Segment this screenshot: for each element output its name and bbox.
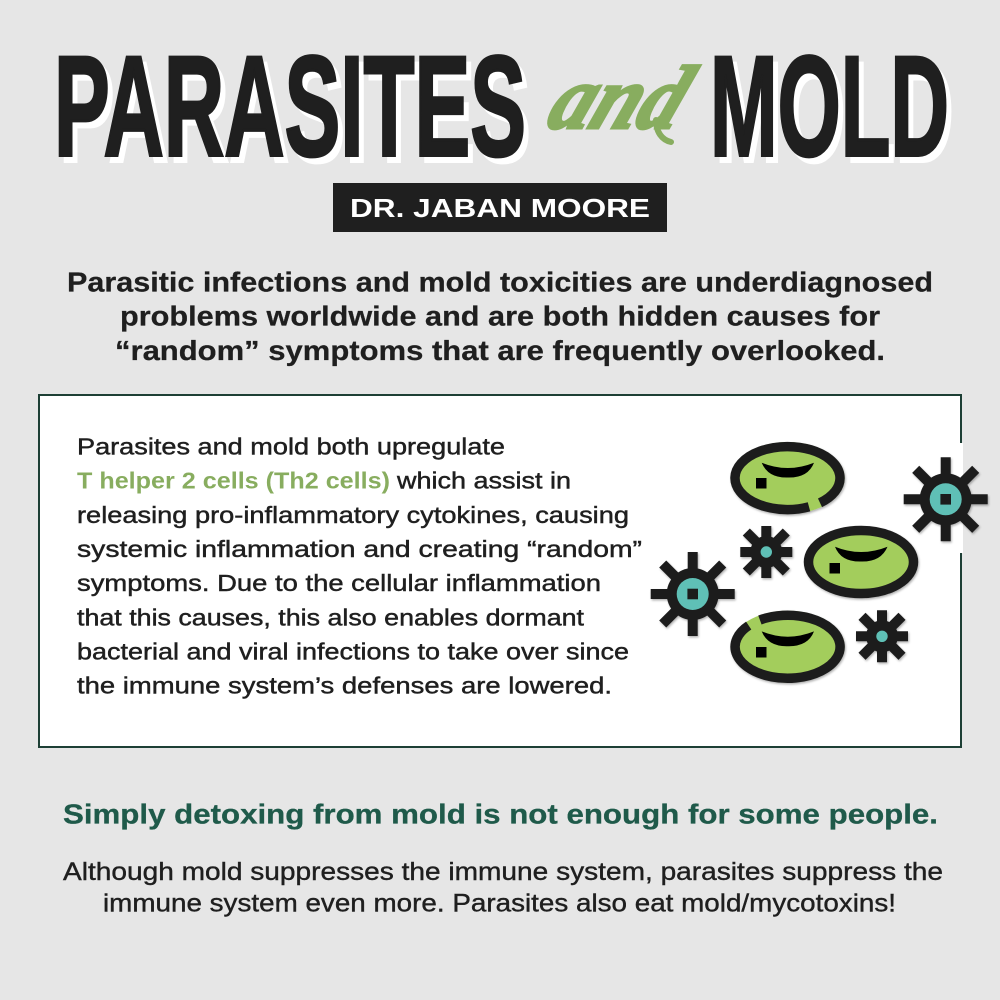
- icon: cell middle: [808, 530, 914, 594]
- icon: cell bottom: [731, 611, 845, 683]
- closing text: immune system even more. Parasites also eat mold/mycotoxins!: [103, 890, 896, 918]
- panel body text: Parasites and mold both upregulate: [77, 434, 505, 460]
- icon: parasites and mold spores: [651, 442, 988, 683]
- icon: cell top: [731, 442, 845, 514]
- title word: and: and: [536, 49, 707, 148]
- icon: small spore centre: [740, 526, 792, 578]
- intro text: problems worldwide and are both hidden causes for: [120, 300, 880, 332]
- icon: spore left: [651, 552, 735, 636]
- panel: explanation: [39, 395, 963, 747]
- highlighted term: T helper 2 cells (Th2 cells): [77, 468, 390, 494]
- panel body text: bacterial and viral infections to take over since: [77, 638, 629, 664]
- intro text: [67, 266, 933, 366]
- panel body text: that this causes, this also enables dormant: [77, 604, 585, 630]
- panel body text: [77, 434, 642, 698]
- intro text: Parasitic infections and mold toxicities are underdiagnosed: [67, 266, 933, 298]
- title: [54, 28, 954, 192]
- panel body text: releasing pro-inflammatory cytokines, causing: [77, 502, 629, 528]
- icon: small spore right: [856, 610, 908, 662]
- panel body text: symptoms. Due to the cellular inflammation: [77, 570, 601, 596]
- intro text: “random” symptoms that are frequently overlooked.: [115, 335, 885, 366]
- author badge: [333, 183, 667, 232]
- panel body text: the immune system’s defenses are lowered.: [77, 672, 612, 698]
- panel body text: which assist in: [396, 468, 571, 494]
- closing text: [63, 858, 943, 918]
- green callout heading: Simply detoxing from mold is not enough for some people.: [63, 798, 938, 830]
- author badge: DR. JABAN MOORE: [350, 193, 650, 223]
- title word: PARASITES: PARASITES: [59, 34, 531, 192]
- title word: PARASITES: [54, 28, 531, 192]
- icon: spore right: [904, 457, 988, 541]
- panel body text: systemic inflammation and creating “random”: [77, 536, 642, 562]
- closing text: Although mold suppresses the immune system, parasites suppress the: [63, 858, 943, 886]
- title word: PARASITES: PARASITES: [54, 28, 526, 186]
